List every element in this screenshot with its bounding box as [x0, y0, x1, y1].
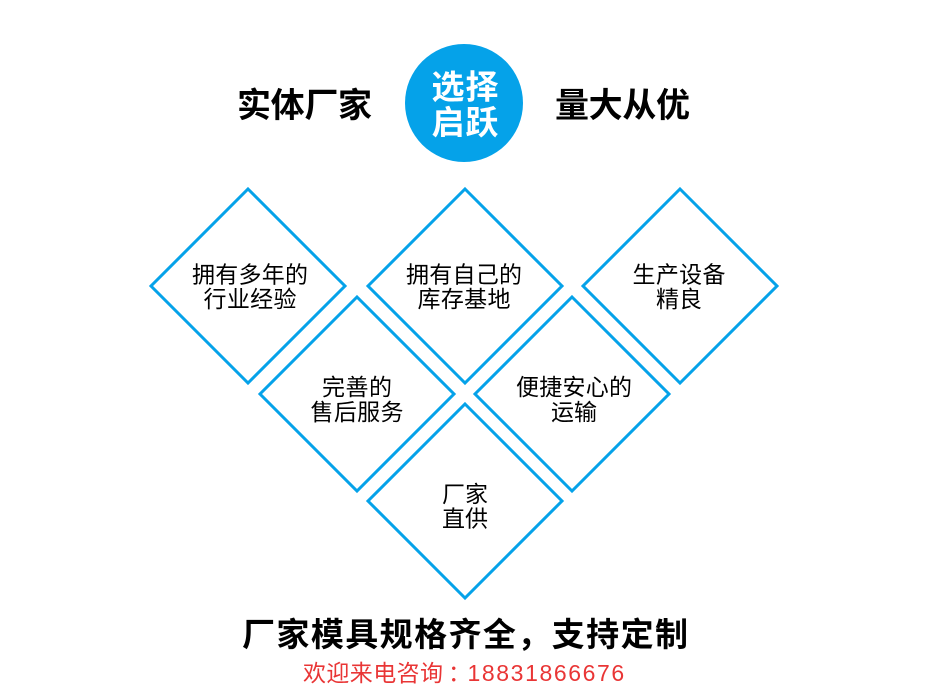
diamond: 厂家直供: 直供 [442, 506, 488, 532]
contact line: 欢迎来电咨询 [303, 660, 443, 686]
diamond: 生产设备精良: 生产设备 [632, 262, 726, 288]
diamond: 拥有自己的库存基地: 库存基地 [418, 286, 510, 312]
center circle badge: 启跃 [432, 104, 498, 141]
contact line: 18831866676 [468, 660, 626, 686]
heading right: 量大从优: 量大从优 [555, 87, 690, 125]
center circle badge: 选择 [432, 68, 498, 106]
contact line: ： [448, 660, 471, 686]
center circle badge [405, 44, 523, 162]
diamond: 便捷安心的运输: 运输 [551, 399, 597, 425]
diamond: 拥有多年的行业经验: 拥有多年的 [192, 262, 308, 288]
diamond: 完善的售后服务: 售后服务 [310, 399, 404, 425]
diamond: 拥有多年的行业经验 [151, 189, 345, 383]
diamond: 便捷安心的运输: 便捷安心的 [516, 374, 632, 400]
diamond: 厂家直供 [368, 404, 562, 598]
diamond: 拥有自己的库存基地: 拥有自己的 [406, 262, 522, 288]
diamond: 完善的售后服务: 完善的 [322, 374, 392, 400]
diamond: 厂家直供: 厂家 [442, 481, 488, 507]
diamond: 完善的售后服务 [260, 297, 454, 491]
diamond: 拥有多年的行业经验: 行业经验 [204, 286, 296, 312]
diamond: 拥有自己的库存基地 [368, 189, 562, 383]
diamond: 生产设备精良: 精良 [656, 286, 702, 312]
diamond: 便捷安心的运输 [475, 297, 669, 491]
heading left: 实体厂家: 实体厂家 [237, 87, 372, 125]
slogan: 厂家模具规格齐全，支持定制 [242, 616, 688, 653]
diamond: 生产设备精良 [583, 189, 777, 383]
